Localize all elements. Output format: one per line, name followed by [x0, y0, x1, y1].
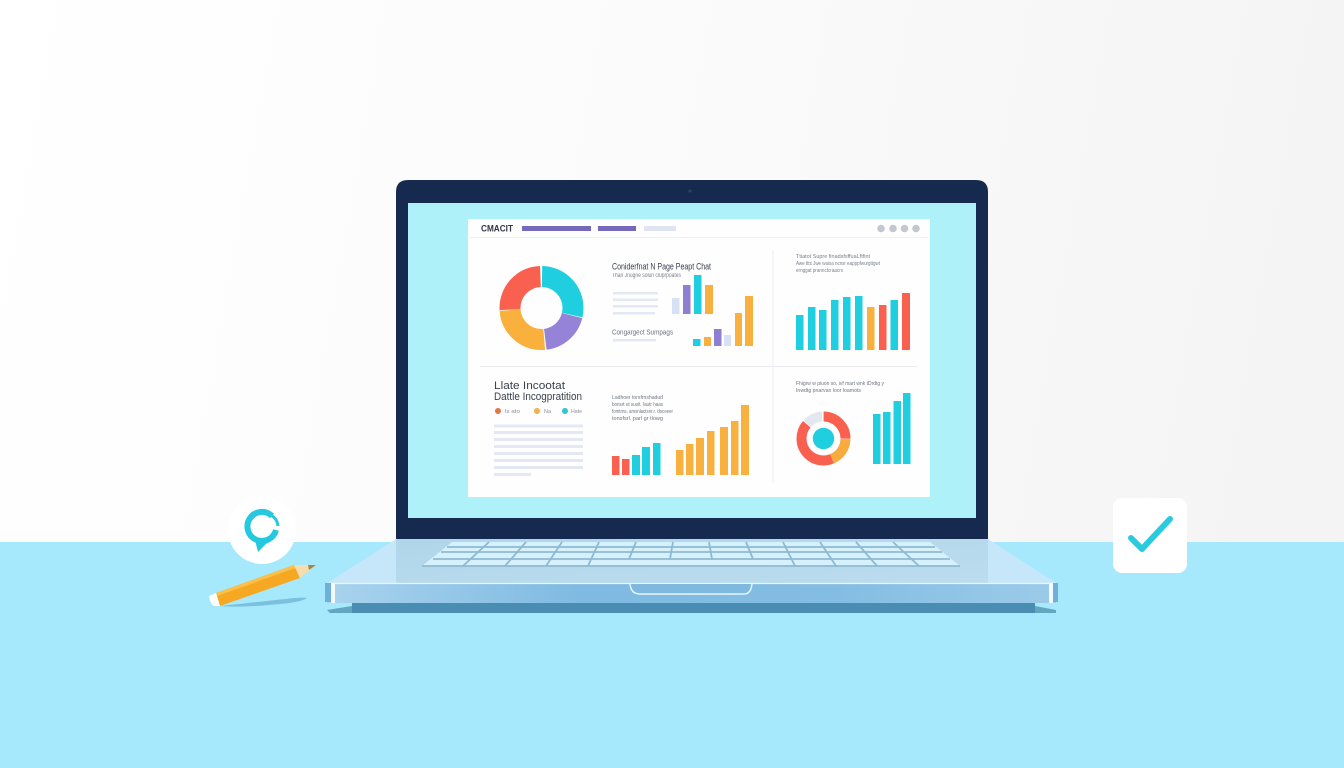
- text block: lower middle: tonsfsrl. parl gr tlowg: [612, 416, 663, 422]
- heading: data integration: Dattle Incogpratition: [494, 391, 582, 403]
- laptop lid: [396, 180, 988, 539]
- donut centre disc: [813, 428, 834, 449]
- text block: lower middle: bonsrt ut suoit. Iautr haas: [612, 402, 663, 408]
- text block: lower middle: fomtrns. amsnlactsnr.r. doceeer: [612, 409, 673, 415]
- dashboard header: [470, 224, 928, 238]
- chart heading: Coniderfnat N Page Peapt Chat: [612, 262, 711, 272]
- legend: [495, 408, 582, 415]
- speech bubble badge: [228, 496, 296, 564]
- legend: Hate: [571, 409, 582, 415]
- camera: [688, 189, 692, 193]
- desk surface: [0, 542, 1344, 768]
- trackpad notch: [630, 584, 752, 594]
- text block: top right: [796, 254, 880, 274]
- text block: top right: Awe ttts Jwe waisa ncnsr eapppfwurgttgwt: [796, 261, 880, 267]
- bar chart: top right: [796, 293, 910, 350]
- text block: lower right: [796, 381, 884, 394]
- text block: top right: Ttiatot Supre finadsfsffuaLftfint: [796, 254, 870, 260]
- heading: data integration: Llate Incootat: [494, 380, 565, 392]
- bar chart: lower orange: [676, 405, 749, 475]
- dashboard header: CMACIT: [481, 224, 513, 234]
- text block: lower middle: Ladhoer torsfrnshadud: [612, 395, 663, 401]
- legend: ls ato: [505, 409, 520, 415]
- legend: Na: [544, 409, 552, 415]
- donut chart: lower right: [802, 416, 846, 460]
- heading: data integration: [494, 380, 582, 403]
- caption: Congargect Sumpags: [612, 330, 673, 336]
- bar chart: lower right teal: [873, 393, 910, 464]
- text placeholder lines: [613, 292, 658, 314]
- card: check mark: [1113, 498, 1187, 573]
- text placeholder lines: lower left: [494, 424, 583, 476]
- donut chart: main: [510, 276, 573, 340]
- text block: top right: ernggat prannctcraacrs: [796, 268, 843, 274]
- laptop base deck: [327, 539, 1056, 583]
- bar chart: rising mixed: [693, 296, 753, 346]
- text block: lower right: Fhigrw w piuon so, ivf mart wnk tDrdtg y: [796, 381, 884, 387]
- laptop: [325, 180, 1058, 613]
- icon: pencil: [209, 565, 316, 607]
- icon: chat ring: [247, 512, 278, 552]
- chart subheading: Than Jnugne solun cluprpoates: [612, 273, 681, 279]
- text block: lower middle: [612, 395, 673, 422]
- icon: check: [1131, 519, 1170, 549]
- dashboard panel: [468, 219, 930, 497]
- bar chart: small mixed: [672, 275, 713, 314]
- bar chart: lower red and teal: [612, 443, 660, 475]
- laptop shadow: [327, 603, 1056, 613]
- text block: lower right: Inwdtg pnarvan loor loamots: [796, 388, 861, 394]
- laptop front edge: [325, 583, 1058, 603]
- keyboard panel: [396, 539, 988, 583]
- screen: [408, 203, 976, 518]
